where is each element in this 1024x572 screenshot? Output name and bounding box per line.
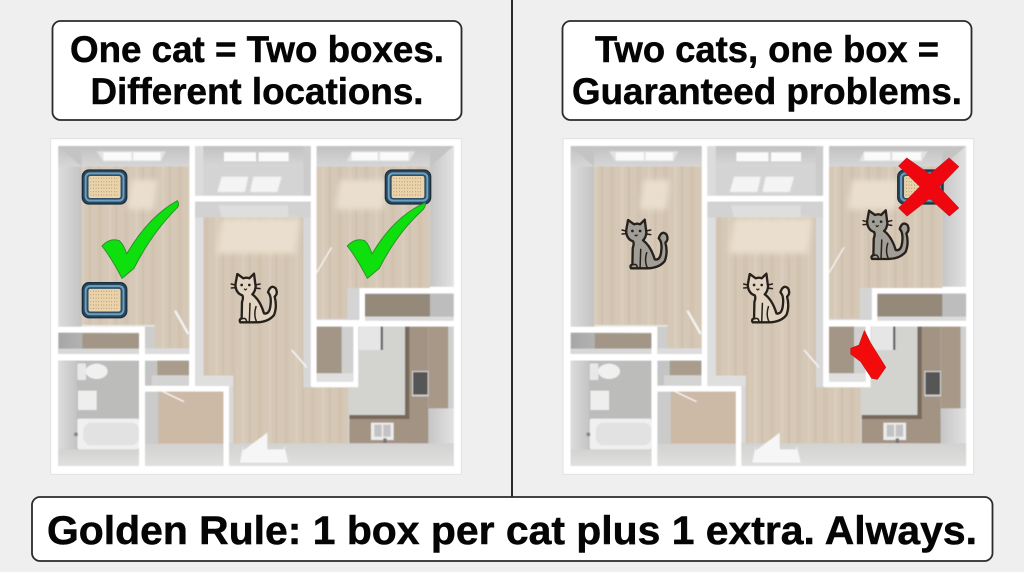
icon: cat right room — [863, 210, 909, 259]
panel: left floor plan, one cat two boxes — [51, 139, 461, 474]
callout: golden rule — [32, 497, 992, 561]
icon: cat left room — [622, 220, 668, 268]
icon: green check right — [347, 203, 425, 278]
heading: left panel: One cat = Two boxes. — [70, 29, 444, 70]
icon: litter box top-right — [385, 170, 431, 204]
icon: cat center — [231, 274, 277, 322]
center divider — [511, 0, 513, 497]
heading: left panel: Different locations. — [90, 71, 424, 112]
icon: cat center — [744, 274, 789, 322]
icon: green check left — [102, 201, 179, 278]
heading: right panel — [562, 21, 972, 120]
icon: litter box top-left — [82, 170, 127, 204]
icon: litter box crossed out — [898, 170, 943, 204]
callout: golden rule: Golden Rule: 1 box per cat plus 1 extra. Always. — [47, 509, 977, 553]
heading: right panel: Guaranteed problems. — [572, 71, 962, 112]
heading: left panel — [52, 21, 462, 120]
heading: right panel: Two cats, one box = — [595, 29, 939, 70]
icon: litter box bottom-left — [82, 283, 127, 318]
icon: red mess — [851, 331, 886, 379]
icon: red X — [899, 158, 959, 216]
panel: right floor plan, two cats one box — [563, 139, 974, 474]
